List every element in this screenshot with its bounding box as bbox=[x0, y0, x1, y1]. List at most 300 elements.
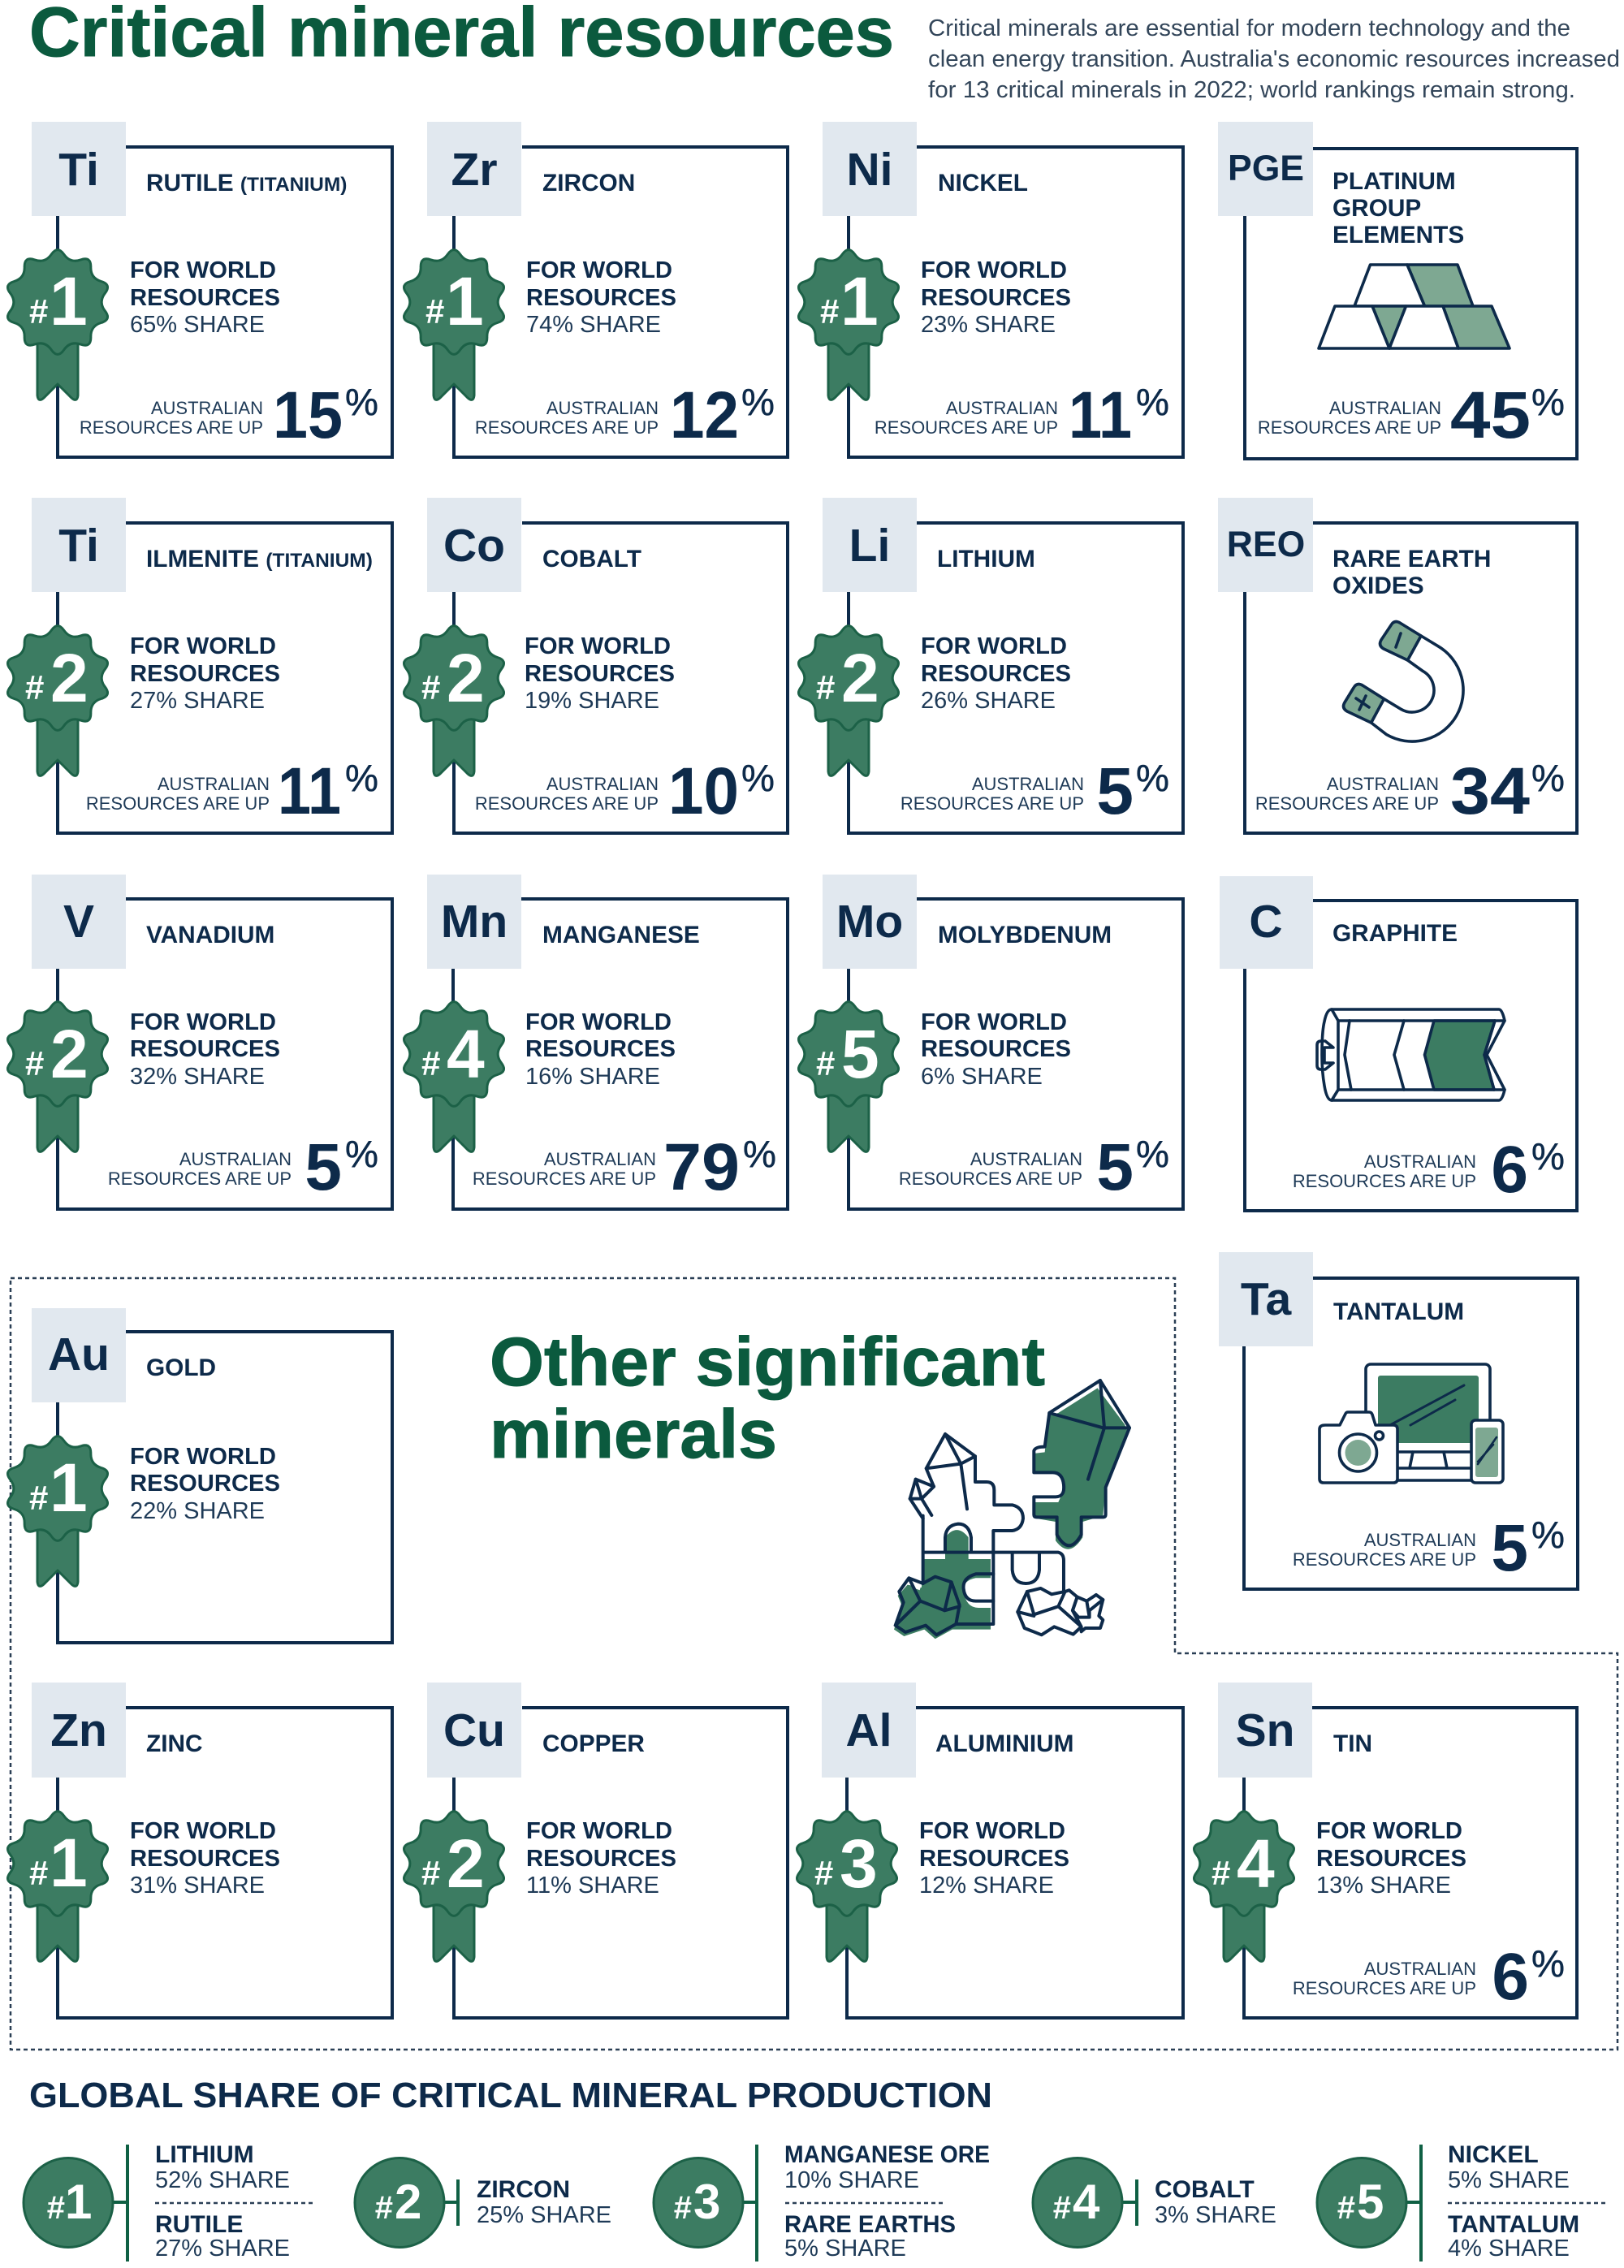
intro paragraph: for 13 critical minerals in 2022; world rankings remain strong. bbox=[928, 77, 1575, 103]
element tile: Ti: Ti bbox=[58, 144, 99, 196]
growth stat bbox=[1258, 378, 1565, 452]
rank 4: cobalt: 4 bbox=[1073, 2175, 1100, 2229]
panel: tin bbox=[1194, 1683, 1577, 2018]
element tile: Ni bbox=[823, 122, 917, 216]
growth stat: RESOURCES ARE UP bbox=[475, 417, 659, 438]
element tile: Cu: Cu bbox=[443, 1704, 505, 1756]
element tile: PGE: PGE bbox=[1228, 149, 1304, 188]
growth stat bbox=[899, 1130, 1169, 1204]
world resources text bbox=[1316, 1818, 1466, 1899]
rank badge: 2 bbox=[841, 640, 879, 716]
growth stat bbox=[1293, 1133, 1565, 1207]
growth stat: % bbox=[743, 1133, 776, 1175]
rank 4: cobalt: 3% SHARE bbox=[1155, 2202, 1276, 2228]
element tile: Ti bbox=[32, 122, 126, 216]
element tile: Li bbox=[823, 498, 917, 592]
growth stat bbox=[473, 1130, 776, 1204]
world resources text bbox=[130, 257, 280, 338]
heading: other significant minerals: Other significant bbox=[490, 1324, 1045, 1400]
world resources text: FOR WORLD bbox=[130, 257, 276, 283]
growth stat: 6 bbox=[1492, 1940, 1529, 2014]
growth stat bbox=[875, 378, 1169, 452]
rank 1: lithium and rutile: RUTILE bbox=[155, 2211, 243, 2238]
growth stat: % bbox=[1136, 381, 1169, 423]
rank 2: zircon: 25% SHARE bbox=[477, 2202, 611, 2228]
rank badge bbox=[404, 1812, 504, 1961]
growth stat: AUSTRALIAN bbox=[1327, 774, 1439, 794]
world resources text: RESOURCES bbox=[921, 285, 1071, 311]
mineral name: PLATINUM bbox=[1332, 168, 1456, 195]
element tile: Al: Al bbox=[846, 1704, 892, 1756]
rank badge bbox=[798, 1002, 899, 1151]
growth stat: AUSTRALIAN bbox=[1364, 1151, 1476, 1172]
rank badge: 2 bbox=[447, 1825, 485, 1902]
card frame bbox=[58, 1708, 392, 2018]
growth stat: RESOURCES ARE UP bbox=[901, 793, 1084, 814]
card frame bbox=[1245, 901, 1577, 1211]
growth stat bbox=[80, 378, 378, 452]
element tile: Ti: Ti bbox=[58, 520, 99, 572]
growth stat: AUSTRALIAN bbox=[546, 774, 659, 794]
growth stat: % bbox=[345, 1133, 378, 1175]
mineral name bbox=[1332, 546, 1491, 599]
rank 5: nickel and tantalum: NICKEL bbox=[1448, 2141, 1539, 2168]
panel: gold bbox=[7, 1308, 392, 1643]
rank badge: # bbox=[814, 1854, 833, 1892]
world resources text: FOR WORLD bbox=[526, 257, 672, 283]
rank badge bbox=[7, 1436, 108, 1586]
growth stat: % bbox=[1531, 1135, 1565, 1177]
world resources text bbox=[921, 257, 1071, 338]
world resources text: 19% SHARE bbox=[525, 688, 659, 714]
growth stat: RESOURCES ARE UP bbox=[1293, 1549, 1476, 1570]
card frame bbox=[849, 147, 1183, 457]
panel: vanadium bbox=[7, 875, 392, 1209]
growth stat: % bbox=[1531, 757, 1565, 799]
world resources text: FOR WORLD bbox=[921, 1009, 1067, 1035]
mineral name: OXIDES bbox=[1332, 572, 1424, 599]
element tile: Mo bbox=[823, 875, 917, 969]
world resources text: 32% SHARE bbox=[130, 1064, 265, 1090]
growth stat: RESOURCES ARE UP bbox=[1258, 417, 1441, 438]
card frame bbox=[1244, 1278, 1578, 1589]
growth stat: % bbox=[1531, 1514, 1565, 1556]
growth stat: AUSTRALIAN bbox=[946, 398, 1058, 418]
icon: devices bbox=[1320, 1364, 1503, 1483]
heading: other significant minerals bbox=[490, 1324, 1045, 1472]
growth stat bbox=[1293, 1940, 1565, 2014]
rank badge bbox=[798, 250, 899, 400]
mineral name: GOLD bbox=[146, 1354, 216, 1381]
rank badge bbox=[404, 250, 504, 400]
rank badge: # bbox=[25, 1044, 44, 1082]
world resources text: 12% SHARE bbox=[919, 1873, 1054, 1899]
world resources text: RESOURCES bbox=[921, 1036, 1071, 1062]
element tile: REO bbox=[1218, 498, 1313, 592]
rank badge: # bbox=[425, 292, 444, 330]
card frame bbox=[1244, 1708, 1577, 2018]
growth stat: % bbox=[1136, 757, 1169, 799]
rank badge bbox=[7, 250, 108, 400]
element tile: Co: Co bbox=[443, 520, 505, 572]
rank badge: # bbox=[421, 1044, 440, 1082]
rank 5: nickel and tantalum: TANTALUM bbox=[1448, 2211, 1579, 2238]
world resources text: 27% SHARE bbox=[130, 688, 265, 714]
element tile: Al bbox=[822, 1683, 916, 1778]
panel: cobalt bbox=[404, 498, 788, 833]
world resources text: FOR WORLD bbox=[130, 1818, 276, 1844]
world resources text bbox=[525, 633, 675, 714]
element tile: V: V bbox=[63, 896, 94, 948]
element tile: Mn bbox=[427, 875, 521, 969]
rank badge: # bbox=[816, 668, 835, 706]
rank 5: nickel and tantalum: 5% SHARE bbox=[1448, 2167, 1570, 2193]
world resources text bbox=[130, 1444, 280, 1524]
growth stat bbox=[1293, 1511, 1565, 1585]
world resources text: RESOURCES bbox=[526, 1846, 676, 1872]
mineral name: MANGANESE bbox=[542, 922, 700, 948]
growth stat: AUSTRALIAN bbox=[158, 774, 270, 794]
panel: tantalum bbox=[1219, 1252, 1578, 1589]
rank 1: lithium and rutile bbox=[24, 2141, 313, 2262]
world resources text bbox=[526, 257, 676, 338]
growth stat: 34 bbox=[1450, 754, 1530, 828]
card frame bbox=[58, 523, 392, 833]
world resources text: FOR WORLD bbox=[525, 633, 671, 659]
rank 2: zircon: # bbox=[375, 2190, 393, 2226]
rank 3: manganese ore and rare earths: # bbox=[674, 2190, 692, 2226]
heading: other significant minerals: minerals bbox=[490, 1396, 777, 1472]
rank badge: 1 bbox=[50, 1449, 88, 1526]
element tile: Ni: Ni bbox=[846, 144, 893, 196]
world resources text: 26% SHARE bbox=[921, 688, 1056, 714]
growth stat: AUSTRALIAN bbox=[972, 774, 1084, 794]
growth stat bbox=[86, 754, 378, 828]
growth stat: AUSTRALIAN bbox=[1364, 1530, 1476, 1550]
growth stat: 79 bbox=[663, 1130, 740, 1204]
rank badge: 4 bbox=[1237, 1825, 1275, 1902]
element tile: Au: Au bbox=[48, 1328, 110, 1380]
element tile: REO: REO bbox=[1227, 525, 1305, 564]
mineral name: RARE EARTH bbox=[1332, 546, 1491, 572]
rank badge: 5 bbox=[841, 1016, 879, 1092]
mineral name: VANADIUM bbox=[146, 922, 274, 948]
rank badge: 4 bbox=[447, 1016, 485, 1092]
card frame bbox=[58, 1332, 392, 1643]
growth stat: 11 bbox=[278, 754, 341, 828]
mineral name: NICKEL bbox=[938, 170, 1028, 197]
rank 3: manganese ore and rare earths: 10% SHARE bbox=[784, 2167, 919, 2193]
world resources text: RESOURCES bbox=[525, 1036, 676, 1062]
panel: platinum group elements bbox=[1218, 122, 1577, 459]
growth stat: AUSTRALIAN bbox=[1364, 1959, 1476, 1979]
growth stat: RESOURCES ARE UP bbox=[475, 793, 659, 814]
rank badge bbox=[404, 1002, 504, 1151]
world resources text: RESOURCES bbox=[130, 1036, 280, 1062]
growth stat bbox=[901, 754, 1169, 828]
growth stat: 45 bbox=[1450, 378, 1531, 452]
icon: magnet bbox=[1344, 622, 1463, 741]
growth stat: RESOURCES ARE UP bbox=[86, 793, 270, 814]
rank badge: 2 bbox=[447, 640, 485, 716]
growth stat bbox=[108, 1130, 378, 1204]
rank 1: lithium and rutile: 52% SHARE bbox=[155, 2167, 290, 2193]
element tile: C: C bbox=[1249, 896, 1283, 948]
world resources text bbox=[130, 633, 280, 714]
growth stat: AUSTRALIAN bbox=[179, 1149, 292, 1169]
growth stat: AUSTRALIAN bbox=[546, 398, 659, 418]
element tile: Zn: Zn bbox=[50, 1704, 107, 1756]
world resources text: 16% SHARE bbox=[525, 1064, 660, 1090]
panel: nickel bbox=[798, 122, 1183, 457]
rank badge bbox=[7, 1002, 108, 1151]
growth stat: 10 bbox=[668, 754, 739, 828]
element tile: Sn bbox=[1218, 1683, 1312, 1778]
world resources text: RESOURCES bbox=[130, 1471, 280, 1497]
world resources text: 74% SHARE bbox=[526, 312, 661, 338]
rank 2: zircon: ZIRCON bbox=[477, 2176, 570, 2203]
growth stat: RESOURCES ARE UP bbox=[473, 1169, 656, 1189]
rank 1: lithium and rutile: # bbox=[47, 2190, 65, 2226]
growth stat: 15 bbox=[273, 378, 343, 452]
rank badge: # bbox=[25, 668, 44, 706]
element tile: C bbox=[1220, 876, 1313, 969]
card frame bbox=[849, 523, 1183, 833]
element tile: Ti bbox=[32, 498, 126, 592]
rank 1: lithium and rutile: 27% SHARE bbox=[155, 2236, 290, 2262]
world resources text: RESOURCES bbox=[130, 285, 280, 311]
element tile: Zr: Zr bbox=[451, 144, 497, 196]
growth stat: 11 bbox=[1069, 378, 1132, 452]
rank 1: lithium and rutile: 1 bbox=[65, 2175, 92, 2229]
rank badge bbox=[404, 626, 504, 775]
panel: manganese bbox=[404, 875, 788, 1209]
mineral name: ILMENITE (TITANIUM) bbox=[146, 546, 373, 572]
growth stat: RESOURCES ARE UP bbox=[1293, 1978, 1476, 1998]
world resources text bbox=[526, 1818, 676, 1899]
icon: battery bbox=[1317, 1009, 1505, 1100]
growth stat: RESOURCES ARE UP bbox=[108, 1169, 292, 1189]
heading: global share: GLOBAL SHARE OF CRITICAL MINERAL PRODUCTION bbox=[29, 2076, 992, 2115]
growth stat: % bbox=[345, 757, 378, 799]
rank badge: # bbox=[1212, 1854, 1230, 1892]
rank badge bbox=[7, 626, 108, 775]
panel: copper bbox=[404, 1683, 788, 2018]
growth stat: 5 bbox=[1491, 1511, 1528, 1585]
panel: ilmenite bbox=[7, 498, 392, 833]
mineral name: TANTALUM bbox=[1333, 1298, 1464, 1325]
element tile: Sn: Sn bbox=[1236, 1704, 1294, 1756]
element tile: PGE bbox=[1218, 122, 1313, 216]
growth stat bbox=[1255, 754, 1565, 828]
rank badge: # bbox=[816, 1044, 835, 1082]
rank badge bbox=[797, 1812, 897, 1961]
world resources text: FOR WORLD bbox=[526, 1818, 672, 1844]
growth stat: % bbox=[1531, 1942, 1565, 1985]
card frame bbox=[1245, 523, 1577, 833]
world resources text bbox=[525, 1009, 676, 1090]
growth stat: 6 bbox=[1491, 1133, 1528, 1207]
mineral name: ELEMENTS bbox=[1332, 222, 1464, 248]
growth stat: RESOURCES ARE UP bbox=[875, 417, 1058, 438]
rank 3: manganese ore and rare earths: RARE EARTHS bbox=[784, 2211, 956, 2238]
growth stat: % bbox=[1531, 381, 1565, 423]
rank badge: # bbox=[29, 1479, 48, 1517]
panel: lithium bbox=[798, 498, 1183, 833]
rank badge: # bbox=[29, 1854, 48, 1892]
mineral name: MOLYBDENUM bbox=[938, 922, 1112, 948]
rank 2: zircon bbox=[355, 2158, 611, 2248]
element tile: Co bbox=[427, 498, 521, 592]
growth stat: RESOURCES ARE UP bbox=[899, 1169, 1082, 1189]
world resources text bbox=[921, 633, 1071, 714]
world resources text: RESOURCES bbox=[921, 661, 1071, 687]
rank badge: # bbox=[421, 668, 440, 706]
panel: molybdenum bbox=[798, 875, 1183, 1209]
world resources text: FOR WORLD bbox=[1316, 1818, 1462, 1844]
rank 5: nickel and tantalum bbox=[1317, 2141, 1607, 2262]
rank 1: lithium and rutile: LITHIUM bbox=[155, 2141, 254, 2168]
growth stat: AUSTRALIAN bbox=[1329, 398, 1441, 418]
card frame bbox=[454, 523, 788, 833]
rank 4: cobalt: COBALT bbox=[1155, 2176, 1255, 2203]
rank 2: zircon: 2 bbox=[395, 2175, 421, 2229]
world resources text: RESOURCES bbox=[919, 1846, 1069, 1872]
element tile: Cu bbox=[427, 1683, 521, 1778]
rank badge: 1 bbox=[50, 263, 88, 339]
panel: zircon bbox=[404, 122, 788, 457]
world resources text: 22% SHARE bbox=[130, 1498, 265, 1524]
intro paragraph: clean energy transition. Australia's economic resources increased bbox=[928, 46, 1620, 72]
world resources text: 11% SHARE bbox=[526, 1873, 659, 1899]
world resources text: RESOURCES bbox=[1316, 1846, 1466, 1872]
world resources text: FOR WORLD bbox=[919, 1818, 1065, 1844]
growth stat: 5 bbox=[304, 1130, 342, 1204]
element tile: Au bbox=[32, 1308, 126, 1402]
element tile: Mn: Mn bbox=[441, 896, 508, 948]
growth stat: % bbox=[345, 381, 378, 423]
rank 5: nickel and tantalum: 5 bbox=[1357, 2175, 1384, 2229]
mineral name: RUTILE (TITANIUM) bbox=[146, 170, 347, 197]
mineral name: COPPER bbox=[542, 1730, 645, 1757]
growth stat: RESOURCES ARE UP bbox=[1255, 793, 1439, 814]
rank badge: # bbox=[421, 1854, 440, 1892]
rank badge: 3 bbox=[840, 1825, 878, 1902]
rank badge: 2 bbox=[50, 640, 89, 716]
growth stat: % bbox=[741, 757, 775, 799]
icon: puzzle pieces and crystals bbox=[894, 1380, 1129, 1639]
growth stat: AUSTRALIAN bbox=[970, 1149, 1082, 1169]
world resources text: 31% SHARE bbox=[130, 1873, 265, 1899]
mineral name bbox=[1332, 168, 1464, 248]
icon: gold bars bbox=[1319, 265, 1510, 348]
rank badge: # bbox=[820, 292, 839, 330]
world resources text: RESOURCES bbox=[130, 661, 280, 687]
growth stat bbox=[475, 754, 775, 828]
panel: dashed other significant minerals outline bbox=[11, 1278, 1618, 2050]
mineral name: TIN bbox=[1333, 1730, 1372, 1757]
world resources text: 23% SHARE bbox=[921, 312, 1056, 338]
rank badge bbox=[1194, 1812, 1294, 1961]
world resources text: 65% SHARE bbox=[130, 312, 265, 338]
panel: rare earth oxides bbox=[1218, 498, 1577, 833]
rank 3: manganese ore and rare earths: 5% SHARE bbox=[784, 2236, 906, 2262]
growth stat: % bbox=[741, 381, 775, 423]
rank badge bbox=[7, 1812, 108, 1961]
world resources text: 13% SHARE bbox=[1316, 1873, 1451, 1899]
card frame bbox=[454, 1708, 788, 2018]
world resources text: RESOURCES bbox=[526, 285, 676, 311]
mineral name: COBALT bbox=[542, 546, 641, 572]
rank badge: # bbox=[29, 292, 48, 330]
rank 5: nickel and tantalum: 4% SHARE bbox=[1448, 2236, 1570, 2262]
mineral name: ZIRCON bbox=[542, 170, 635, 197]
growth stat: 5 bbox=[1096, 1130, 1134, 1204]
world resources text bbox=[921, 1009, 1071, 1090]
card frame bbox=[1245, 149, 1577, 459]
mineral name: ALUMINIUM bbox=[935, 1730, 1073, 1757]
card frame bbox=[453, 899, 788, 1209]
element tile: Zn bbox=[32, 1683, 126, 1778]
card frame bbox=[847, 1708, 1183, 2018]
rank badge bbox=[798, 626, 899, 775]
panel: aluminium bbox=[797, 1683, 1183, 2018]
growth stat: 12 bbox=[670, 378, 739, 452]
growth stat: % bbox=[1136, 1133, 1169, 1175]
world resources text: FOR WORLD bbox=[130, 1444, 276, 1470]
world resources text: FOR WORLD bbox=[130, 633, 276, 659]
card frame bbox=[849, 899, 1183, 1209]
rank badge: 2 bbox=[50, 1016, 89, 1092]
mineral name: GRAPHITE bbox=[1332, 920, 1458, 947]
world resources text: RESOURCES bbox=[525, 661, 675, 687]
card frame bbox=[454, 147, 788, 457]
intro paragraph bbox=[928, 15, 1620, 103]
element tile: Li: Li bbox=[849, 520, 890, 572]
world resources text: FOR WORLD bbox=[921, 633, 1067, 659]
world resources text bbox=[919, 1818, 1069, 1899]
intro paragraph: Critical minerals are essential for modern technology and the bbox=[928, 15, 1570, 41]
rank badge: 1 bbox=[446, 263, 484, 339]
element tile: Mo: Mo bbox=[836, 896, 903, 948]
element tile: Ta: Ta bbox=[1241, 1273, 1292, 1325]
growth stat: RESOURCES ARE UP bbox=[1293, 1171, 1476, 1191]
growth stat bbox=[475, 378, 775, 452]
element tile: Zr bbox=[427, 122, 521, 216]
mineral name: LITHIUM bbox=[937, 546, 1035, 572]
world resources text bbox=[130, 1818, 280, 1899]
rank 3: manganese ore and rare earths: MANGANESE ORE bbox=[784, 2141, 990, 2168]
world resources text: 6% SHARE bbox=[921, 1064, 1043, 1090]
mineral name: GROUP bbox=[1332, 195, 1421, 222]
rank 5: nickel and tantalum: # bbox=[1337, 2190, 1355, 2226]
mineral name: ZINC bbox=[146, 1730, 203, 1757]
element tile: Ta bbox=[1219, 1252, 1313, 1346]
card frame bbox=[58, 899, 392, 1209]
panel: rutile bbox=[7, 122, 392, 457]
panel: zinc bbox=[7, 1683, 392, 2018]
rank badge: 1 bbox=[840, 263, 879, 339]
rank 3: manganese ore and rare earths bbox=[654, 2141, 990, 2262]
growth stat: AUSTRALIAN bbox=[544, 1149, 656, 1169]
world resources text bbox=[130, 1009, 280, 1090]
growth stat: RESOURCES ARE UP bbox=[80, 417, 263, 438]
panel: graphite bbox=[1220, 876, 1577, 1211]
rank badge: 1 bbox=[50, 1825, 88, 1901]
world resources text: FOR WORLD bbox=[921, 257, 1067, 283]
world resources text: FOR WORLD bbox=[525, 1009, 672, 1035]
element tile: V bbox=[32, 875, 126, 969]
